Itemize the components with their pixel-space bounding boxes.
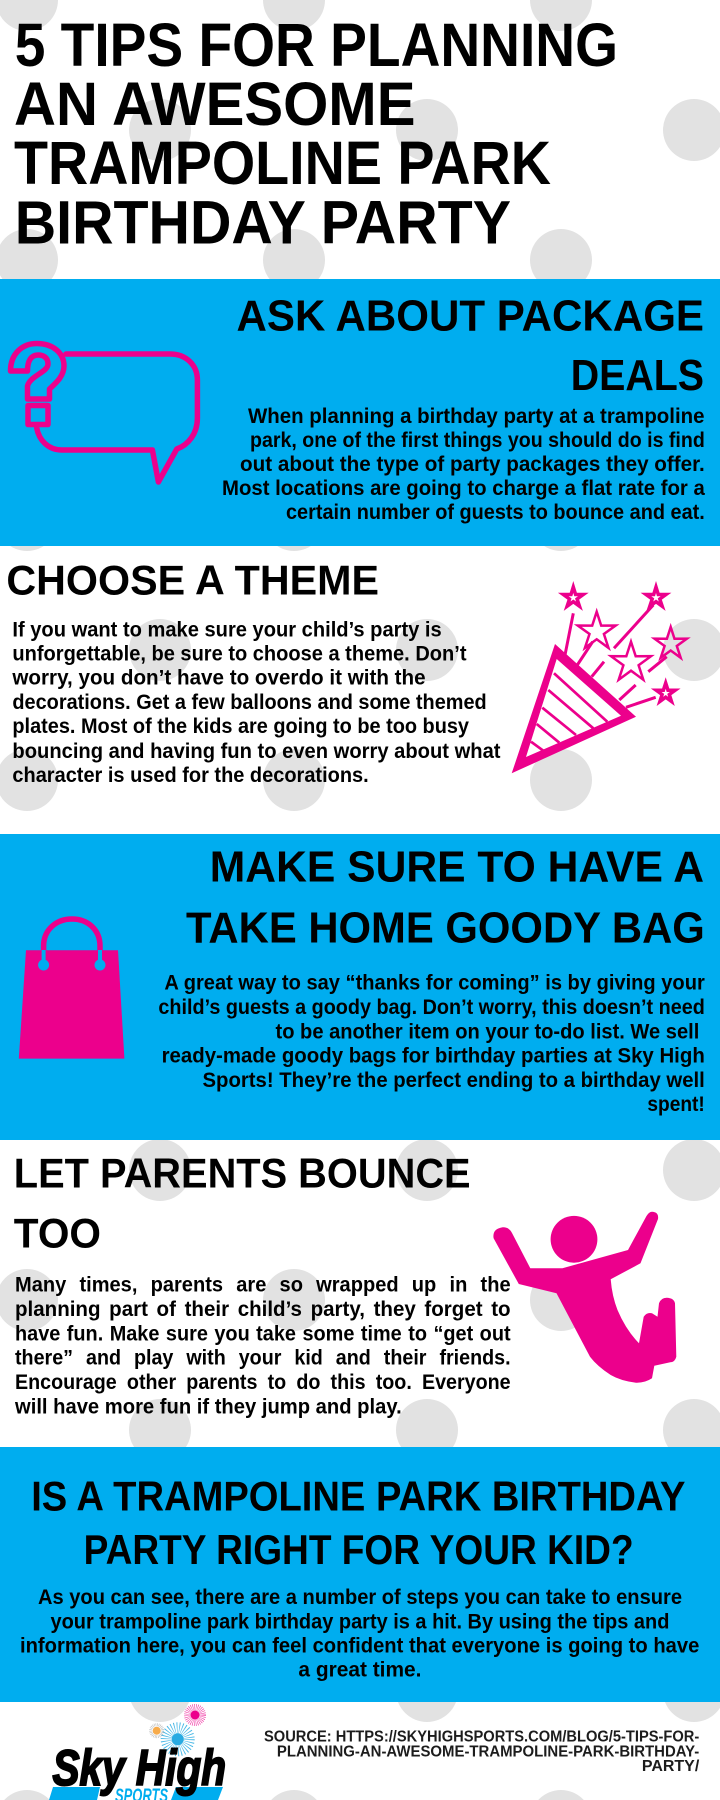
panel: ask about package deals: [0, 279, 720, 546]
panel: is a trampoline park birthday party right: [0, 1447, 720, 1702]
text block: goody bag body: to be another item on your to-do list. We sell: [276, 1020, 699, 1043]
text block: conclusion body: As you can see, there are a number of steps you can take to ensure: [38, 1586, 682, 1609]
text block: parents body: Many times, parents are so wrapped up in the: [15, 1273, 511, 1296]
heading: ask about package deals: [236, 292, 704, 400]
text block: goody bag body: A great way to say “thanks for coming” is by giving your: [164, 972, 705, 995]
text block: goody bag body: spent!: [647, 1093, 705, 1116]
text block: theme body: bouncing and having fun to even worry about what: [12, 740, 501, 763]
text block: theme body: decorations. Get a few balloons and some themed: [12, 691, 487, 714]
source citation: PARTY/: [642, 1758, 700, 1775]
icon: question mark speech bubble: [10, 344, 197, 482]
text block: theme body: If you want to make sure your child’s party is: [12, 618, 442, 641]
heading: let parents bounce too: LET PARENTS BOUNCE: [14, 1149, 471, 1196]
text block: package deals body: certain number of guests to bounce and eat.: [286, 501, 705, 524]
icon: orange dot: [151, 1725, 163, 1737]
text block: goody bag body: ready-made goody bags for birthday parties at Sky High: [162, 1044, 705, 1067]
source citation: SOURCE: HTTPS://SKYHIGHSPORTS.COM/BLOG/5-TIPS-FOR-: [264, 1729, 699, 1746]
text block: package deals body: When planning a birthday party at a trampoline: [248, 405, 704, 428]
source citation: PLANNING-AN-AWESOME-TRAMPOLINE-PARK-BIRTHDAY-: [277, 1743, 699, 1760]
title: [14, 11, 618, 256]
text block: parents body: planning part of their child’s party, they forget to: [15, 1298, 511, 1321]
icon: pink burst: [188, 1708, 202, 1722]
text block: parents body: [14, 1273, 511, 1418]
wordmark: Sky High: Sky High: [52, 1740, 226, 1796]
icon: shopping bag: [19, 919, 124, 1059]
text block: parents body: Encourage other parents to do this too. Everyone: [15, 1371, 511, 1394]
heading: ask about package deals: DEALS: [571, 351, 704, 400]
text block: conclusion body: your trampoline park birthday party is a hit. By using the tips and: [50, 1610, 669, 1633]
text block: conclusion body: [20, 1586, 699, 1682]
text block: package deals body: [222, 405, 705, 524]
heading: let parents bounce too: [14, 1149, 471, 1256]
text block: parents body: will have more fun if they jump and play.: [14, 1395, 402, 1418]
panel: take home goody bag: [0, 834, 720, 1140]
heading: goody bag: TAKE HOME GOODY BAG: [186, 904, 705, 953]
text block: package deals body: Most locations are going to charge a flat rate for a: [222, 477, 705, 500]
heading: conclusion: [31, 1473, 685, 1573]
heading: let parents bounce too: TOO: [14, 1209, 101, 1256]
text block: theme body: [11, 618, 500, 787]
icon: jumping person: [493, 1212, 676, 1383]
title: TRAMPOLINE PARK: [14, 129, 551, 197]
icon: blue burst: [167, 1728, 189, 1750]
heading: choose a theme: CHOOSE A THEME: [6, 557, 379, 604]
text block: theme body: plates. Most of the kids are going to be too busy: [12, 715, 469, 738]
text block: parents body: have fun. Make sure you take some time to “get out: [15, 1322, 511, 1345]
icon: party popper: [512, 587, 687, 773]
text block: goody bag body: [158, 972, 705, 1116]
heading: goody bag: MAKE SURE TO HAVE A: [210, 843, 704, 892]
text block: conclusion body: a great time.: [298, 1659, 422, 1682]
title: AN AWESOME: [14, 70, 416, 138]
text block: goody bag body: Sports! They’re the perfect ending to a birthday well: [202, 1069, 705, 1092]
panel: let parents bounce too: [14, 1149, 676, 1418]
text block: package deals body: out about the type of party packages they offer.: [240, 453, 705, 476]
text block: theme body: worry, you don’t have to overdo it with the: [11, 667, 426, 690]
heading: goody bag: [186, 843, 705, 953]
title: 5 TIPS FOR PLANNING: [15, 11, 618, 79]
source citation: [264, 1729, 700, 1775]
heading: conclusion: PARTY RIGHT FOR YOUR KID?: [84, 1526, 634, 1573]
text block: theme body: character is used for the decorations.: [12, 764, 369, 787]
logo: Sky High Sports: [49, 1708, 226, 1800]
heading: ask about package deals: ASK ABOUT PACKAGE: [236, 292, 704, 340]
panel: choose a theme: [6, 557, 687, 787]
title: BIRTHDAY PARTY: [15, 188, 511, 256]
text block: conclusion body: information here, you can feel confident that everyone is going to have: [20, 1635, 699, 1658]
text block: theme body: unforgettable, be sure to choose a theme. Don’t: [12, 642, 467, 666]
text block: parents body: there” and play with your kid and their friends.: [15, 1347, 511, 1370]
blue swoosh bar: [49, 1787, 223, 1800]
